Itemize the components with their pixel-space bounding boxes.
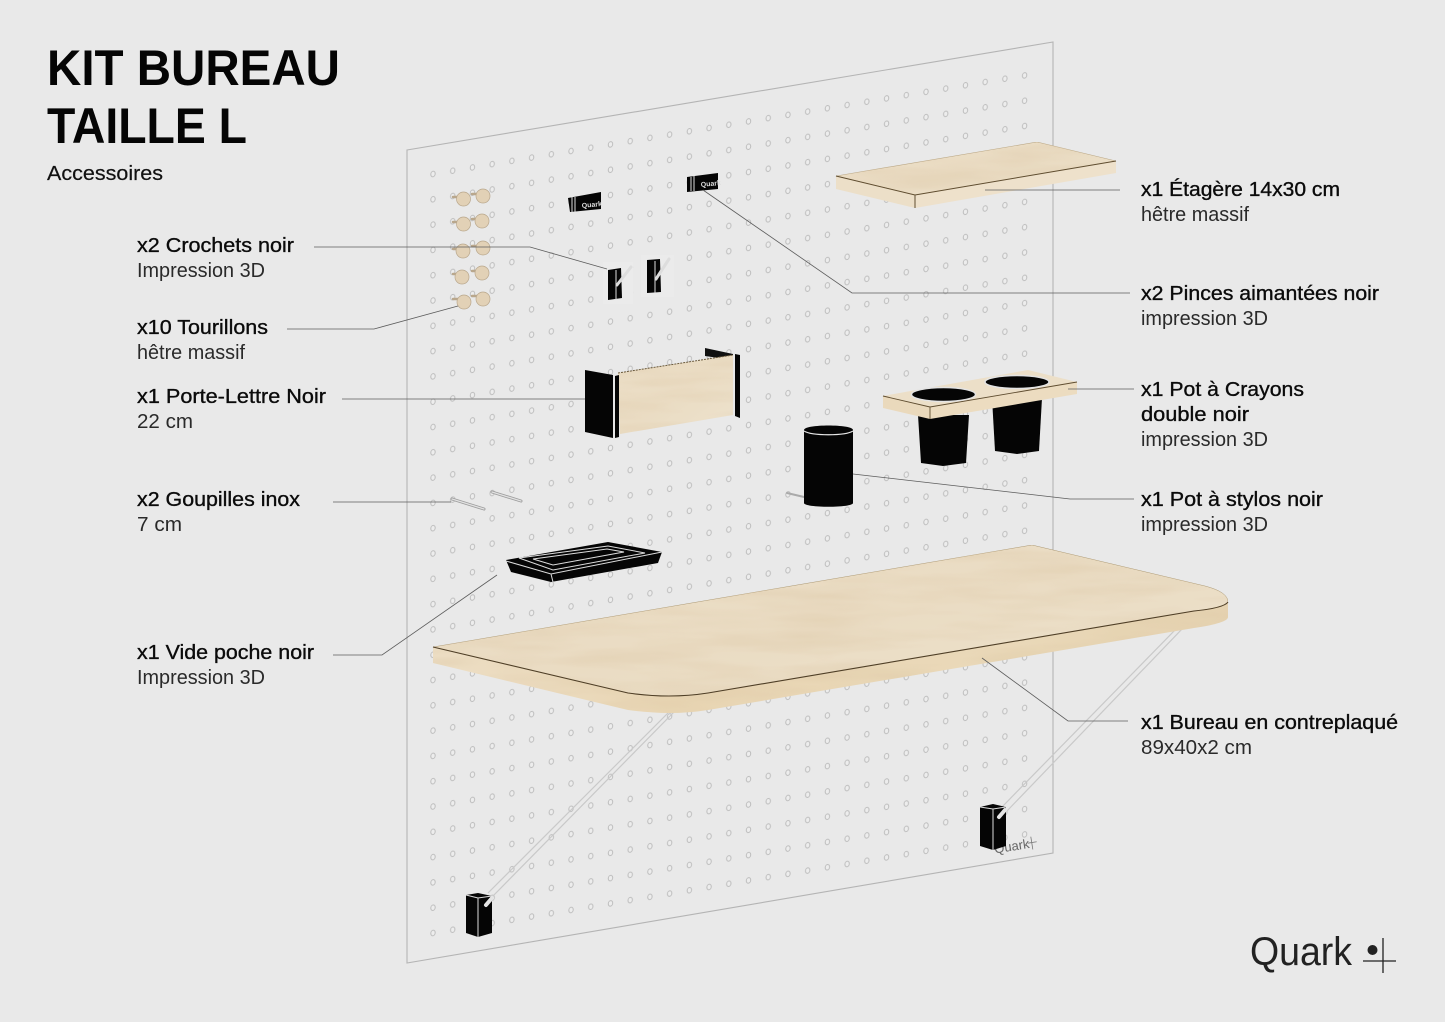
label: bureau (1141, 711, 1398, 759)
icon: magnetic clip right (687, 173, 721, 192)
label: pinces: impression 3D (1141, 307, 1268, 330)
board logo: Quark (993, 836, 1031, 856)
label: bureau: 89x40x2 cm (1141, 736, 1252, 759)
title: KIT BUREAU (47, 40, 340, 96)
label: pinces: x2 Pinces aimantées noir (1141, 282, 1379, 305)
label: etagere: hêtre massif (1141, 203, 1249, 226)
title (47, 40, 340, 154)
pen pot (787, 426, 853, 507)
title: TAILLE L (47, 98, 247, 154)
label: pot a stylos: impression 3D (1141, 513, 1268, 536)
label: pot a stylos: x1 Pot à stylos noir (1141, 488, 1323, 511)
label: tourillons (137, 316, 268, 364)
label: crochets: Impression 3D (137, 259, 265, 282)
label: vide poche: x1 Vide poche noir (137, 641, 314, 664)
label: goupilles (137, 488, 301, 536)
shelf (836, 142, 1116, 208)
label: tourillons: hêtre massif (137, 341, 245, 364)
icon: hook left (603, 262, 633, 304)
tray (506, 542, 662, 582)
label: goupilles: x2 Goupilles inox (137, 488, 301, 511)
label: pot a crayons (1141, 378, 1304, 451)
double pencil pot (883, 370, 1077, 466)
pegboard panel (407, 42, 1053, 963)
label: pot a crayons: double noir (1141, 403, 1249, 426)
label: porte-lettre: x1 Porte-Lettre Noir (137, 385, 326, 408)
label: vide poche: Impression 3D (137, 666, 265, 689)
desk support struts (488, 628, 1183, 896)
icon: wooden dowels (453, 189, 490, 309)
right bracket foot (980, 804, 1006, 850)
letter holder (585, 348, 740, 438)
label: pot a crayons: impression 3D (1141, 428, 1268, 451)
label: pinces (1141, 282, 1379, 330)
subtitle: Accessoires (47, 162, 163, 185)
label: vide poche (137, 641, 314, 689)
label: pot a stylos (1141, 488, 1323, 536)
icon: magnetic clip left: Quark (581, 201, 602, 210)
icon: magnetic clip right: Quark (700, 180, 721, 189)
icon: magnetic clip left (568, 192, 602, 212)
label: crochets (137, 234, 294, 282)
logo: Quark: Quark (1250, 930, 1353, 974)
label: porte-lettre (137, 385, 326, 433)
left bracket foot (466, 893, 492, 937)
stainless pins (452, 492, 521, 509)
icon: hook right (641, 255, 674, 297)
label: pot a crayons: x1 Pot à Crayons (1141, 378, 1304, 401)
label: goupilles: 7 cm (137, 513, 182, 536)
label: porte-lettre: 22 cm (137, 410, 193, 433)
label: bureau: x1 Bureau en contreplaqué (1141, 711, 1398, 734)
label: crochets: x2 Crochets noir (137, 234, 294, 257)
leader lines (287, 190, 1134, 721)
desk (433, 545, 1228, 713)
label: etagere: x1 Étagère 14x30 cm (1141, 178, 1340, 201)
label: etagere (1141, 178, 1340, 226)
label: tourillons: x10 Tourillons (137, 316, 268, 339)
